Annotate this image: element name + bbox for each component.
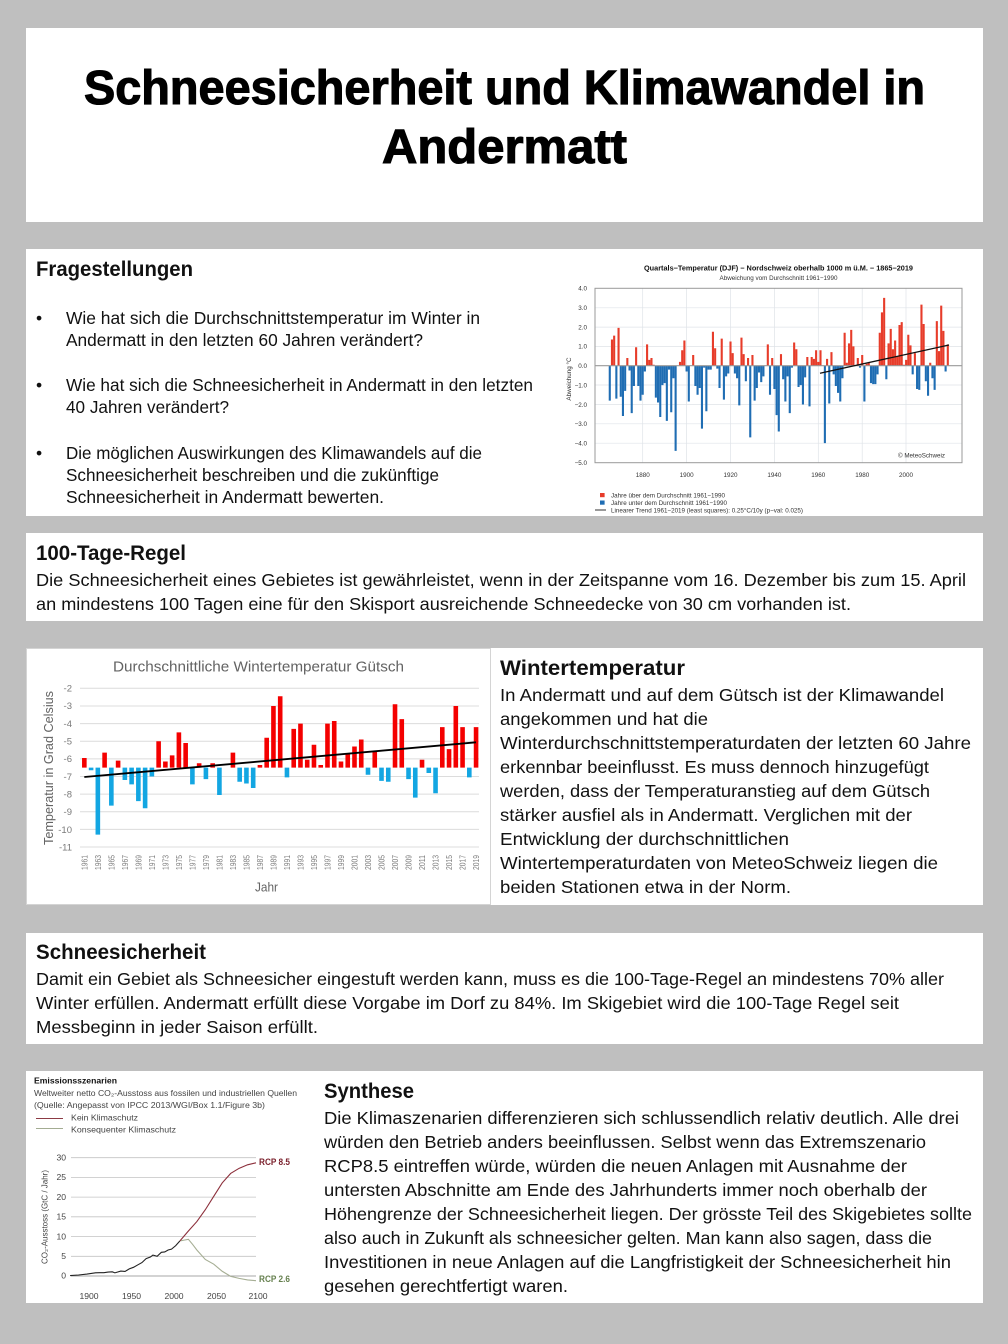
chart heading: (Quelle: Angepasst von IPCC 2013/WGI/Box 1.1/Figure 3b) — [34, 1100, 265, 1110]
x axis labels: 2001 — [350, 855, 360, 870]
x axis labels: 2000 — [899, 472, 913, 479]
question list: Andermatt in den letzten 60 Jahren verändert? — [66, 330, 423, 350]
trend line — [84, 742, 476, 777]
x axis labels: 2005 — [377, 855, 387, 870]
bars below average — [610, 366, 946, 451]
x axis labels: 2009 — [404, 855, 414, 870]
y axis labels: −5.0 — [575, 460, 587, 467]
legend: Linearer Trend 1961−2019 (least squares): 0.25°C/10y (p−val: 0.025) — [611, 506, 803, 514]
question list — [36, 308, 533, 507]
x axis labels: 1989 — [269, 855, 279, 870]
x axis labels: 1995 — [309, 855, 319, 870]
panel: Fragestellungen — [26, 249, 983, 516]
legend: Kein Klimaschutz — [71, 1112, 138, 1122]
x axis labels: 1969 — [134, 855, 144, 870]
legend: Konsequenter Klimaschutz — [71, 1124, 176, 1134]
question list: Die möglichen Auswirkungen des Klimawandels auf die — [66, 443, 482, 463]
x axis labels: 1985 — [242, 855, 252, 870]
question list: • — [36, 308, 42, 328]
y axis labels: -11 — [59, 842, 72, 854]
y axis labels: 4.0 — [578, 286, 587, 292]
text: Wintertemperatur: Entwicklung der durchschnittlichen — [500, 829, 789, 849]
y axis labels: 0.0 — [578, 363, 587, 370]
x axis labels: 2015 — [444, 855, 454, 870]
heading: 100-Tage-Regel: 100-Tage-Regel — [36, 542, 186, 565]
x axis labels: 2011 — [417, 855, 427, 870]
chart: Emissionsszenarien — [34, 1076, 297, 1301]
text: Synthese: untersten Abschnitte am Ende des Jahrhunderts immer noch oberhalb der — [324, 1180, 927, 1200]
y axis labels: 30 — [56, 1152, 66, 1162]
x axis labels — [79, 1291, 268, 1301]
question list: • — [36, 375, 42, 395]
x axis labels: 1991 — [282, 855, 292, 870]
y axis labels: 15 — [56, 1212, 66, 1222]
text: Wintertemperatur: Wintertemperaturdaten von MeteoSchweiz liegen die — [500, 853, 938, 873]
y axis title: Temperatur in Grad Celsius — [41, 691, 56, 845]
x axis labels: 1961 — [80, 855, 90, 870]
y axis labels: 0 — [61, 1270, 66, 1280]
text: Wintertemperatur — [499, 685, 971, 897]
text: Schneesicherheit — [36, 969, 944, 1037]
chart heading — [34, 1076, 297, 1110]
x axis labels: 1971 — [147, 855, 157, 870]
text: rule: an mindestens 100 Tagen eine für den Skisport ausreichende Schneedecke von 30 cm vorhanden ist. — [36, 594, 851, 614]
y axis labels: -4 — [64, 719, 72, 730]
panel: 100-Tage-Regel — [26, 533, 983, 621]
x axis labels: 1999 — [336, 855, 346, 870]
y axis labels: 10 — [56, 1232, 66, 1242]
y axis labels: −2.0 — [575, 402, 587, 409]
panel: Wintertemperatur — [26, 648, 983, 905]
y axis labels: -7 — [64, 772, 72, 783]
x axis labels: 1977 — [188, 855, 198, 870]
text: rule: Die Schneesicherheit eines Gebietes ist gewährleistet, wenn in der Zeitspanne vom 16. Dezember bis zum 15. April — [36, 570, 966, 590]
text: Synthese: würden den Betrieb anders beeinflussen. Selbst wenn das Extremszenario — [323, 1132, 926, 1152]
text: Wintertemperatur: erkennbar beeinflusst. Es muss dennoch hinzugefügt — [500, 757, 929, 777]
question list: Wie hat sich die Schneesicherheit in Andermatt in den letzten — [66, 375, 533, 395]
x axis labels: 2019 — [471, 855, 481, 870]
legend: Jahre unter dem Durchschnitt 1961−1990 — [611, 500, 727, 507]
x axis labels: 1900 — [680, 472, 694, 479]
y axis labels — [58, 684, 72, 854]
text: Wintertemperatur: Winterdurchschnittstemperaturdaten der letzten 60 Jahre — [500, 733, 971, 753]
x axis labels: 1993 — [296, 855, 306, 870]
text: Schneesicherheit: Damit ein Gebiet als Schneesicher eingestuft werden kann, muss es die 100-Tage-Regel an mindestens 70% aller — [36, 969, 944, 989]
bars above baseline — [84, 696, 476, 768]
copyright: © MeteoSchweiz — [898, 452, 945, 460]
x axis labels: 1880 — [636, 472, 650, 479]
x axis labels: 1981 — [215, 855, 225, 870]
heading: Wintertemperatur: Wintertemperatur — [500, 657, 685, 680]
y axis labels: 2.0 — [578, 324, 587, 331]
y axis labels: 25 — [56, 1172, 66, 1182]
y axis labels: 1.0 — [578, 344, 587, 351]
label: RCP 2.6: RCP 2.6 — [259, 1274, 290, 1284]
x axis labels: 1967 — [120, 855, 130, 870]
x axis labels: 2000 — [164, 1291, 184, 1301]
text: Schneesicherheit: Winter erfüllen. Andermatt erfüllt diese Vorgabe im Dorf zu 84%. Im Skigebiet wird die 100-Tage Regel seit — [36, 993, 899, 1013]
x axis labels — [636, 472, 913, 479]
text: Wintertemperatur: stärker ausfiel als in Andermatt. Verglichen mit der — [500, 805, 912, 825]
x axis labels: 1950 — [122, 1291, 141, 1301]
question list: • — [36, 443, 42, 463]
question list: Wie hat sich die Durchschnittstemperatur im Winter in — [66, 308, 480, 328]
text: rule — [36, 570, 966, 614]
title: Schneesicherheit und Klimawandel in — [84, 62, 925, 115]
legend — [595, 492, 803, 514]
text: Synthese — [323, 1108, 972, 1296]
y axis labels: 5 — [61, 1251, 66, 1261]
heading: Synthese: Synthese — [324, 1080, 414, 1103]
heading: Fragestellungen: Fragestellungen — [36, 258, 193, 281]
x axis labels: 1980 — [855, 472, 870, 479]
text: Synthese: Die Klimaszenarien differenzieren sich schlussendlich relativ deutlich. Alle drei — [324, 1108, 959, 1128]
text: Wintertemperatur: angekommen und hat die — [500, 709, 708, 729]
chart title: Abweichung vom Durchschnitt 1961−1990 — [720, 275, 838, 282]
bars above average — [612, 298, 948, 366]
y axis labels — [575, 286, 587, 467]
x axis labels: 1987 — [255, 855, 265, 870]
x axis labels: 1979 — [201, 855, 211, 870]
title: Andermatt — [382, 121, 627, 174]
text: Synthese: gesehen gerechtfertigt waren. — [324, 1276, 568, 1296]
text: Schneesicherheit: Messbeginn in jeder Saison erfüllt. — [36, 1017, 318, 1037]
x axis labels: 1940 — [767, 472, 782, 479]
bars below baseline — [91, 768, 469, 835]
trend line — [820, 345, 949, 373]
x axis labels: 1965 — [106, 855, 116, 870]
y axis labels: -9 — [64, 807, 72, 818]
x axis labels: 1900 — [79, 1291, 99, 1301]
text: Wintertemperatur: beiden Stationen etwa in der Norm. — [500, 877, 791, 897]
line: RCP 8.5 — [180, 1163, 256, 1241]
x axis labels: 2100 — [248, 1291, 268, 1301]
question list: Schneesicherheit beschreiben und die zukünftige — [66, 465, 439, 485]
y axis title: CO₂-Ausstoss (GtC / Jahr) — [40, 1170, 50, 1264]
x axis labels: 2007 — [390, 855, 400, 870]
x axis labels — [80, 855, 481, 870]
legend — [36, 1112, 176, 1134]
x axis labels: 1920 — [723, 472, 738, 479]
x axis labels: 2013 — [431, 855, 441, 870]
line: historical — [70, 1241, 180, 1276]
chart title — [644, 264, 913, 282]
line: RCP 2.6 — [180, 1239, 256, 1281]
heading: Schneesicherheit: Schneesicherheit — [36, 941, 206, 964]
text: Wintertemperatur: In Andermatt und auf dem Gütsch ist der Klimawandel — [500, 685, 944, 705]
x axis labels: 1983 — [228, 855, 238, 870]
x axis title: Jahr — [255, 880, 278, 894]
question list: 40 Jahren verändert? — [66, 397, 229, 417]
text: Synthese: Höhengrenze der Schneesicherheit liegen. Der grösste Teil des Skigebietes sollte — [324, 1204, 972, 1224]
y axis labels: −3.0 — [575, 421, 587, 428]
panel: Synthese — [26, 1071, 983, 1303]
text: Synthese: Investitionen in neue Anlagen auf die Langfristigkeit der Schneesicherheit hin — [324, 1252, 951, 1272]
chart: Quartals-Temperatur MeteoSchweiz — [565, 264, 962, 514]
x axis labels: 1960 — [811, 472, 826, 479]
x axis labels: 2003 — [363, 855, 373, 870]
y axis labels: −4.0 — [575, 440, 587, 448]
y axis labels: -2 — [64, 684, 72, 694]
x axis labels: 1975 — [174, 855, 184, 870]
chart title: Durchschnittliche Wintertemperatur Gütsch — [113, 658, 404, 676]
text: Wintertemperatur: werden, dass der Temperaturanstieg auf dem Gütsch — [499, 781, 930, 801]
y axis labels: -5 — [64, 736, 72, 748]
text: Synthese: also auch in Zukunft als schneesicher gelten. Man kann also sagen, dass die — [324, 1228, 932, 1248]
text: Synthese: RCP8.5 eintreffen würde, würden die neuen Anlagen mit Ausnahme der — [324, 1156, 907, 1176]
y axis labels: -10 — [58, 825, 72, 836]
panel: title — [26, 28, 983, 222]
panel: Schneesicherheit — [26, 933, 983, 1044]
question list: Schneesicherheit in Andermatt bewerten. — [66, 487, 384, 507]
title — [84, 62, 925, 174]
y axis title: Abweichung °C — [565, 357, 573, 401]
x axis labels: 2017 — [458, 855, 468, 870]
x axis labels: 1973 — [160, 855, 170, 870]
y axis labels — [56, 1152, 66, 1280]
y axis labels: −1.0 — [575, 382, 587, 389]
x axis labels: 2050 — [207, 1291, 226, 1301]
chart: Durchschnittliche Wintertemperatur Gütsch — [26, 648, 490, 904]
x axis labels: 1963 — [93, 855, 103, 870]
y axis labels: 20 — [56, 1192, 66, 1202]
legend: Jahre über dem Durchschnitt 1961−1990 — [611, 492, 725, 500]
y axis labels: 3.0 — [578, 305, 587, 312]
chart heading: Weltweiter netto CO₂-Ausstoss aus fossilen und industriellen Quellen — [34, 1088, 297, 1098]
y axis labels: -3 — [64, 701, 72, 712]
chart title: Quartals−Temperatur (DJF) − Nordschweiz oberhalb 1000 m ü.M. − 1865−2019 — [644, 264, 913, 272]
label: RCP 8.5: RCP 8.5 — [259, 1157, 290, 1167]
y axis labels: -6 — [64, 754, 72, 765]
chart heading: Emissionsszenarien — [34, 1076, 117, 1086]
y axis labels: -8 — [64, 790, 72, 800]
x axis labels: 1997 — [323, 855, 333, 870]
